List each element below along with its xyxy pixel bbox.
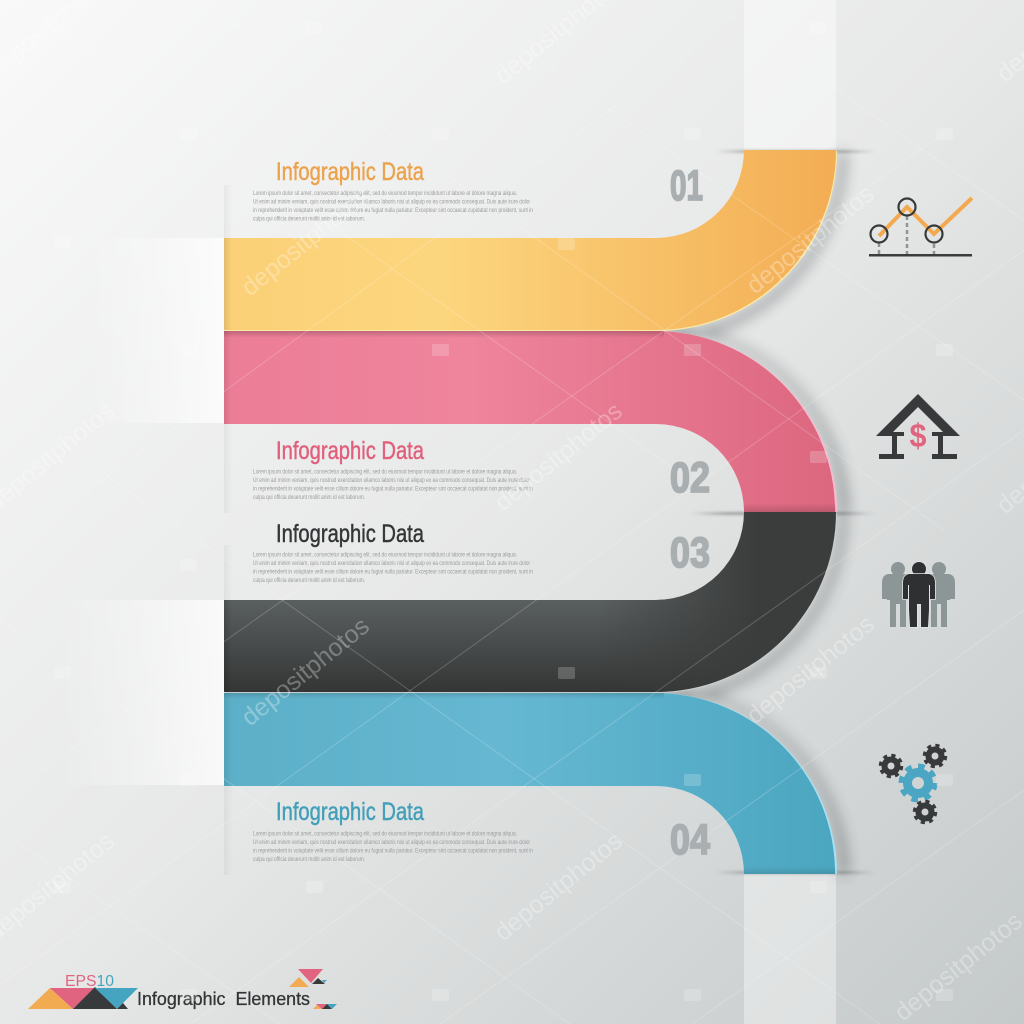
paragraph 4: Lorem ipsum dolor sit amet, consectetur adipiscing elit, sed do eiusmod tempor incididunt ut labore et dolore magna aliqua. <box>253 832 517 838</box>
ribbon 4: blue <box>224 693 837 874</box>
number 03: 03 <box>670 529 710 577</box>
paragraph 1: in reprehenderit in voluptate velit esse cillum dolore eu fugiat nulla pariatur. Excepteur sint occaecat cupidatat non proident, sunt in <box>253 208 533 214</box>
heading 1: Infographic Data <box>276 158 424 186</box>
paragraph 2 <box>253 470 533 501</box>
icon: house with dollar <box>876 394 960 459</box>
heading 4: Infographic Data <box>276 798 424 826</box>
watermark text: depositphotos <box>741 610 880 730</box>
ribbon 1: yellow <box>224 150 837 331</box>
gear bottom <box>914 802 936 822</box>
logo: small triangles top <box>289 969 327 987</box>
paragraph 4: Ut enim ad minim veniam, quis nostrud exercitation ullamco laboris nisi ut aliquip ex ea commodo consequat. Duis aute irure dolor <box>253 840 530 846</box>
heading 3: Infographic Data <box>276 520 424 548</box>
person right <box>925 562 955 627</box>
watermark text: depositphotos <box>489 397 628 517</box>
paragraph 3: culpa qui officia deserunt mollit anim id est laborum. <box>253 578 365 584</box>
text block 3 <box>253 520 533 584</box>
number 04: 04 <box>670 816 710 864</box>
number 01: 01 <box>670 162 703 210</box>
paragraph 4: in reprehenderit in voluptate velit esse cillum dolore eu fugiat nulla pariatur. Excepteur sint occaecat cupidatat non proident, sunt in <box>253 848 533 854</box>
text block 2 <box>253 437 533 501</box>
icon: three people <box>882 562 955 627</box>
paragraph 2: Ut enim ad minim veniam, quis nostrud exercitation ullamco laboris nisi ut aliquip ex ea commodo consequat. Duis aute irure dolor <box>253 478 530 484</box>
logo: triangles <box>28 987 138 1009</box>
paragraph 3 <box>253 552 533 584</box>
gear top right <box>924 746 946 766</box>
watermark text: depositphotos <box>741 180 880 300</box>
paragraph 1: Ut enim ad minim veniam, quis nostrud exercitation ullamco laboris nisi ut aliquip ex ea commodo consequat. Duis aute irure dolor <box>253 200 530 206</box>
fold shadows at ribbon ends <box>690 150 875 874</box>
ribbon 3: black <box>224 512 837 693</box>
folded paper flap: top <box>744 0 836 150</box>
paragraph 4 <box>253 832 533 863</box>
watermark text: depositphotos <box>489 827 628 947</box>
left edge shadows <box>224 185 233 875</box>
paragraph 2: in reprehenderit in voluptate velit esse cillum dolore eu fugiat nulla pariatur. Excepteur sint occaecat cupidatat non proident, sunt in <box>253 486 533 492</box>
paragraph 3: Ut enim ad minim veniam, quis nostrud exercitation ullamco laboris nisi ut aliquip ex ea commodo consequat. Duis aute irure dolor <box>253 561 530 567</box>
logo: Infographic Elements title: Infographic Elements <box>137 989 310 1009</box>
folded paper flap: bottom <box>744 874 836 1024</box>
icon: house with dollar: $ <box>910 417 926 454</box>
logo: small triangles bottom <box>313 1004 337 1009</box>
watermark text: depositphotos <box>236 182 375 302</box>
gear blue <box>901 766 935 800</box>
ribbon 2: pink <box>224 331 837 512</box>
paragraph 1: Lorem ipsum dolor sit amet, consectetur adipiscing elit, sed do eiusmod tempor incididunt ut labore et dolore magna aliqua. <box>253 191 517 197</box>
heading 2: Infographic Data <box>276 437 424 465</box>
folded paper flap: lower left <box>60 600 224 785</box>
paragraph 3: in reprehenderit in voluptate velit esse cillum dolore eu fugiat nulla pariatur. Excepteur sint occaecat cupidatat non proident, sunt in <box>253 570 533 576</box>
folded paper flap: upper left <box>90 238 224 423</box>
person centre <box>903 562 935 627</box>
icon: line chart <box>869 198 972 256</box>
watermark text: depositphotos <box>236 612 375 732</box>
paragraph 1: culpa qui officia deserunt mollit anim id est laborum. <box>253 216 365 222</box>
paragraph 2: Lorem ipsum dolor sit amet, consectetur adipiscing elit, sed do eiusmod tempor incididunt ut labore et dolore magna aliqua. <box>253 470 517 476</box>
person left <box>882 562 912 627</box>
gear left <box>880 756 902 776</box>
text block 4 <box>253 798 533 863</box>
icon: gears <box>880 746 946 822</box>
paragraph 1 <box>253 191 533 222</box>
logo: EPS10 label: EPS10 <box>65 973 114 990</box>
paragraph 3: Lorem ipsum dolor sit amet, consectetur adipiscing elit, sed do eiusmod tempor incididunt ut labore et dolore magna aliqua. <box>253 552 517 558</box>
ribbon outer shadows <box>650 150 848 874</box>
paragraph 4: culpa qui officia deserunt mollit anim id est laborum. <box>253 857 365 863</box>
paragraph 2: culpa qui officia deserunt mollit anim id est laborum. <box>253 495 365 501</box>
number 02: 02 <box>670 454 710 502</box>
text block 1 <box>253 158 533 222</box>
